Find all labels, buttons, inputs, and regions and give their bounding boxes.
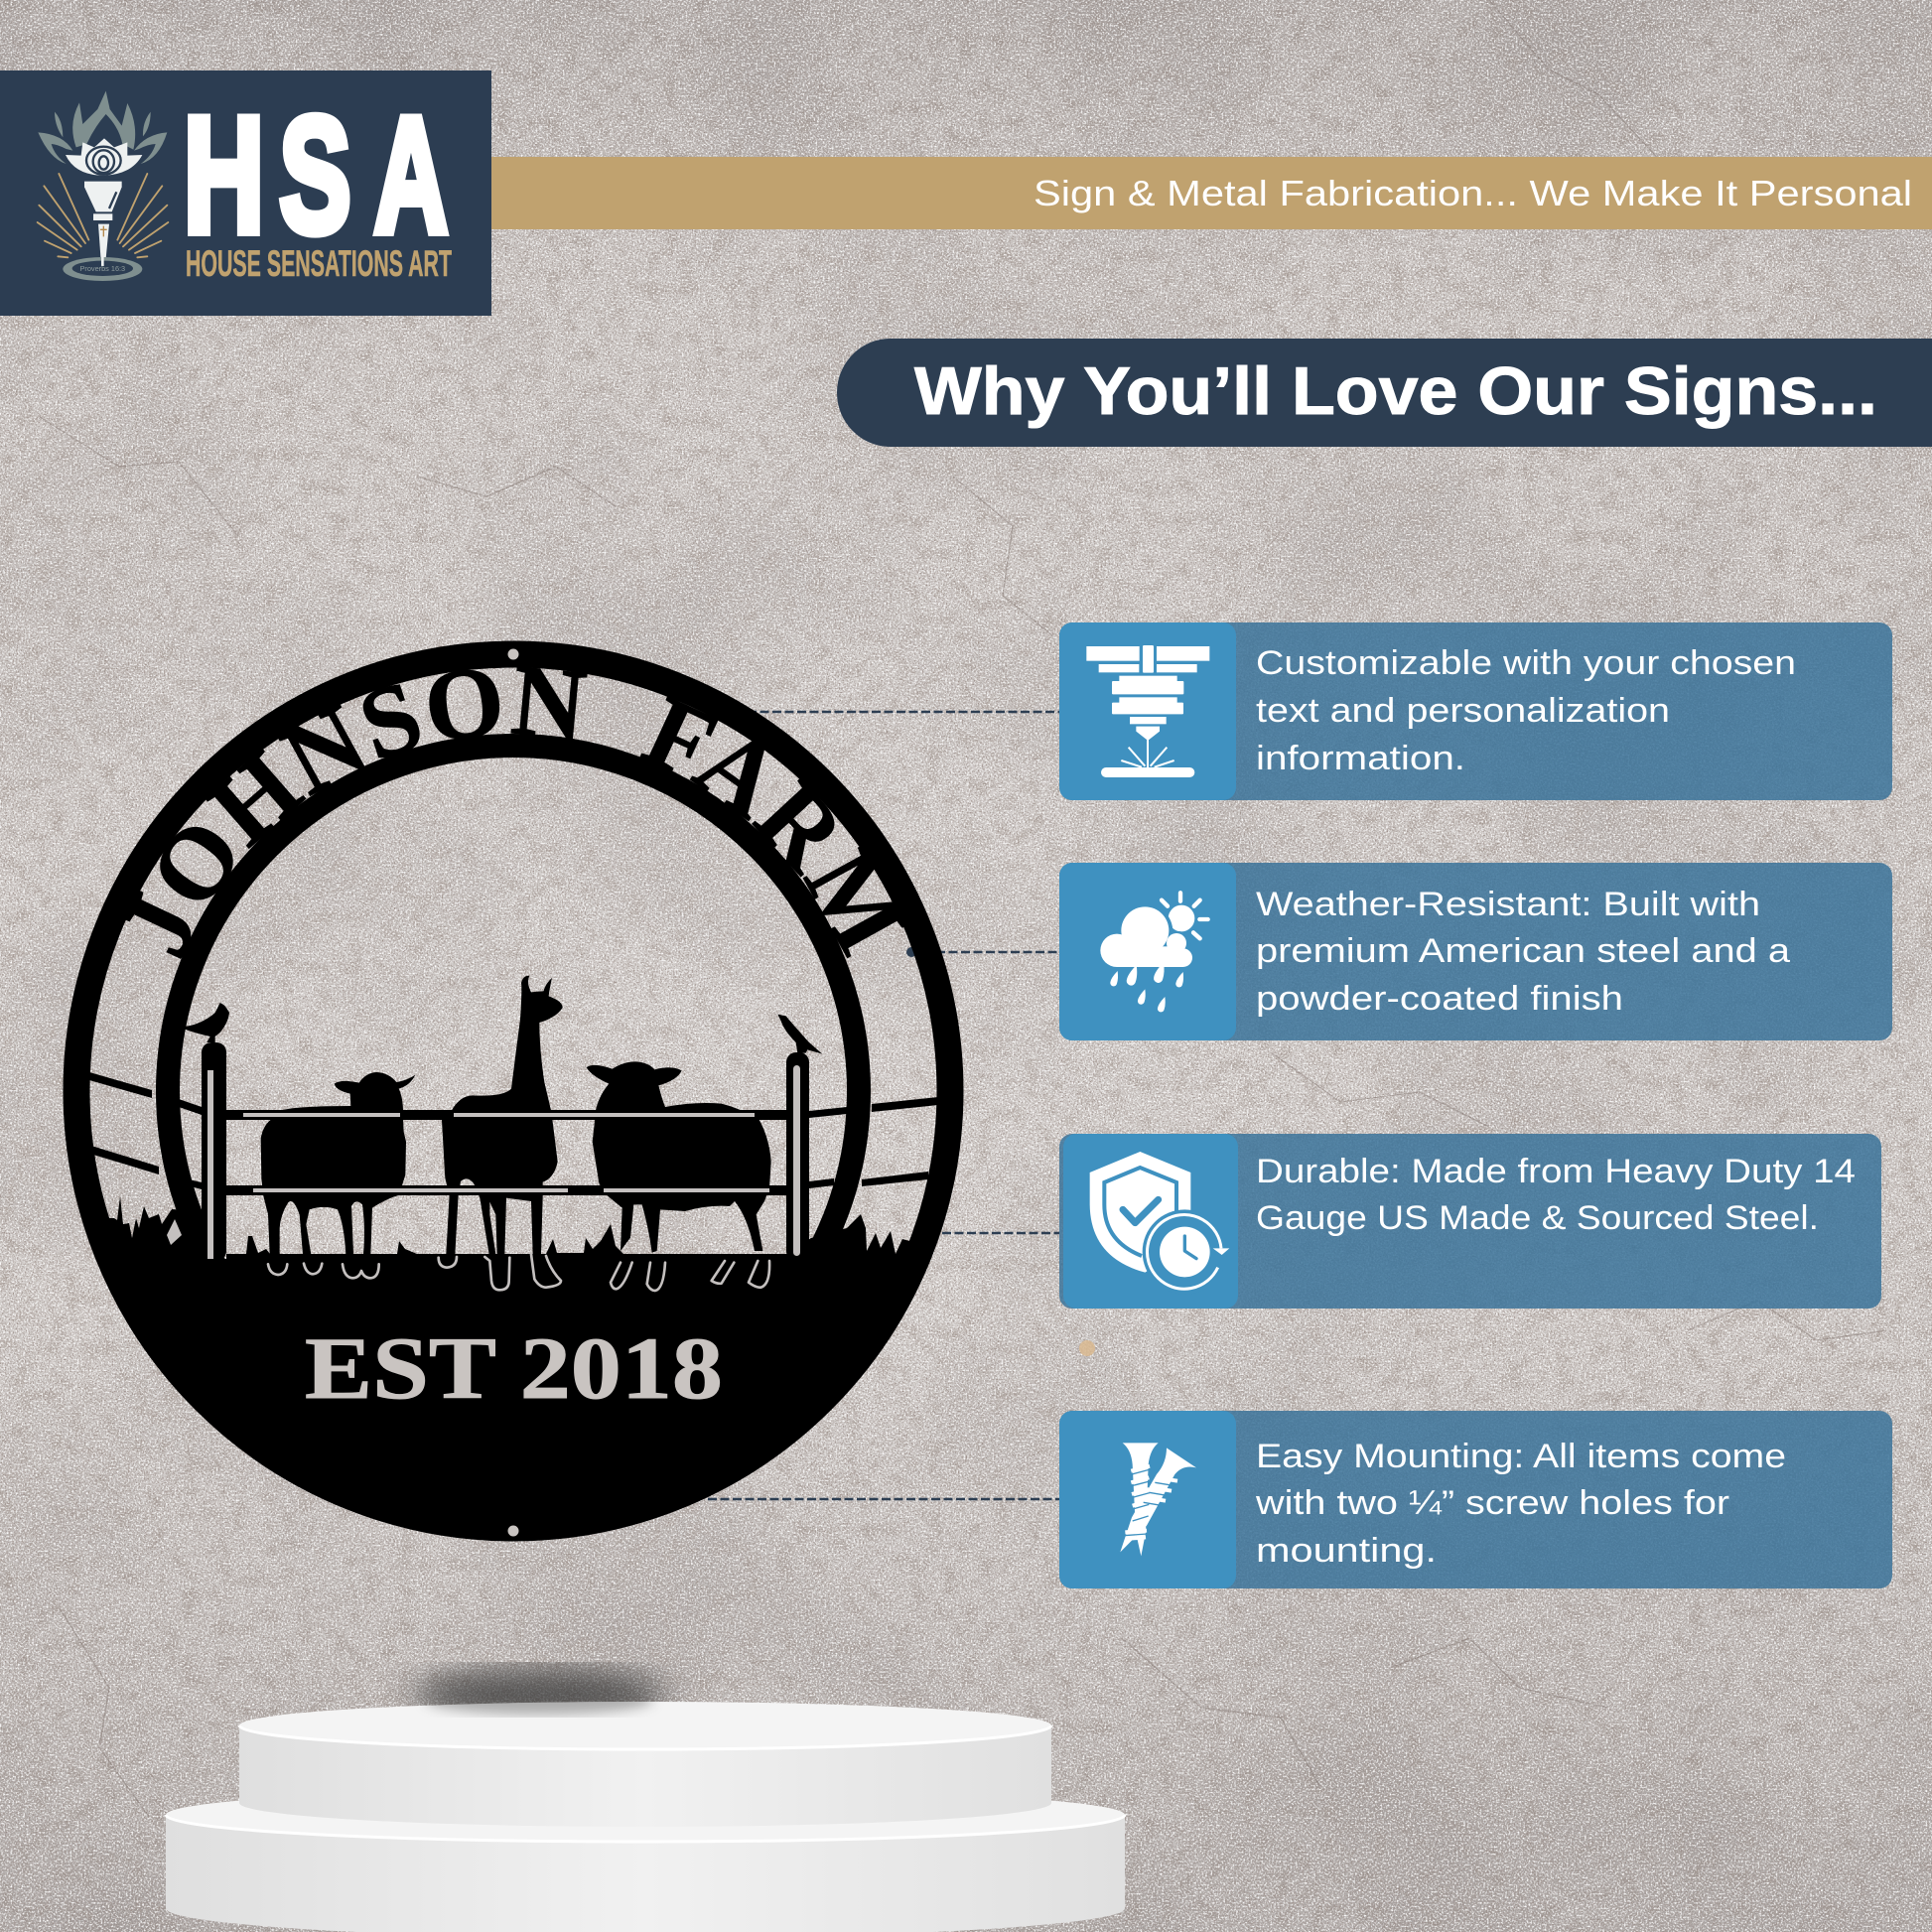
outer ring [76,654,950,1528]
rail highlight cuts [243,1113,769,1192]
right fence post [786,1052,809,1261]
curved name text: JOHNSON FARM [125,667,903,959]
logo wordmark HSA: H [184,83,264,266]
card 3 text: Durable: Made from Heavy Duty 14 [1256,1153,1856,1190]
card 1 text: Customizable with your chosen [1256,644,1796,682]
tagline band [491,157,1932,229]
inner ring [168,746,859,1437]
llama hoof outlines [439,1254,561,1290]
heading pill [837,339,1932,447]
card 4 text: Easy Mounting: All items come [1256,1438,1786,1475]
card 2 text: premium American steel and a [1256,932,1790,970]
icon: shield with clock [1090,1152,1229,1295]
mounting holes [508,649,518,1537]
card 2 text [1256,886,1790,1018]
card 1 text [1256,644,1796,777]
pedestal shadow [412,1668,666,1724]
card 4 text [1255,1438,1786,1570]
connector lines [708,712,1059,1499]
card 1 text: information. [1256,740,1465,777]
gap blob near left grass [167,1219,182,1245]
lower tier [166,1788,1125,1932]
right sheep hoof outlines [611,1261,769,1291]
pedestal [166,1685,1125,1932]
est text: EST 2018 [305,1320,723,1418]
heading text: Why You’ll Love Our Signs... [914,353,1877,429]
card 4: easy mounting [1059,1411,1892,1588]
metal sign: Johnson Farm [64,641,963,1541]
logo emblem: lotus torch [38,91,168,281]
left bird [185,1003,229,1042]
card 4 text: mounting. [1256,1532,1437,1570]
card 2 text: Weather-Resistant: Built with [1256,886,1760,923]
llama [439,976,563,1290]
left sheep [261,1072,415,1278]
icon: two screws [1120,1443,1196,1556]
icon: laser cutter [1086,645,1209,777]
left sheep hoof outlines [268,1264,379,1278]
card 4 text: with two ¼” screw holes for [1255,1484,1729,1522]
upper tier [238,1702,1052,1825]
logo wordmark HSA [184,83,448,266]
ground and grass [109,1196,909,1515]
icon: cloud, sun and rain [1100,893,1208,1012]
logo emblem: lotus torch: Proverbs 16:3 [80,264,125,273]
logo wordmark HSA: S [280,83,351,266]
card 3: durable [1059,1134,1881,1309]
fence outer rails [89,1072,938,1189]
card 1 text: text and personalization [1256,692,1670,730]
card 3 text [1256,1153,1856,1237]
right bird [777,1015,822,1054]
tagline text: Sign & Metal Fabrication... We Make It Personal [1034,173,1912,213]
right sheep [587,1061,771,1291]
card 3 text: Gauge US Made & Sourced Steel. [1256,1199,1819,1237]
left fence post [202,1042,226,1261]
fence top and bottom rails [226,1110,786,1195]
logo subtitle: HOUSE SENSATIONS ART [186,243,452,284]
card 2 text: powder-coated finish [1256,980,1623,1018]
card 1: customizable [1059,622,1892,800]
card 2: weather resistant [1059,863,1892,1040]
logo panel [0,70,491,316]
logo wordmark HSA: A [374,83,448,266]
